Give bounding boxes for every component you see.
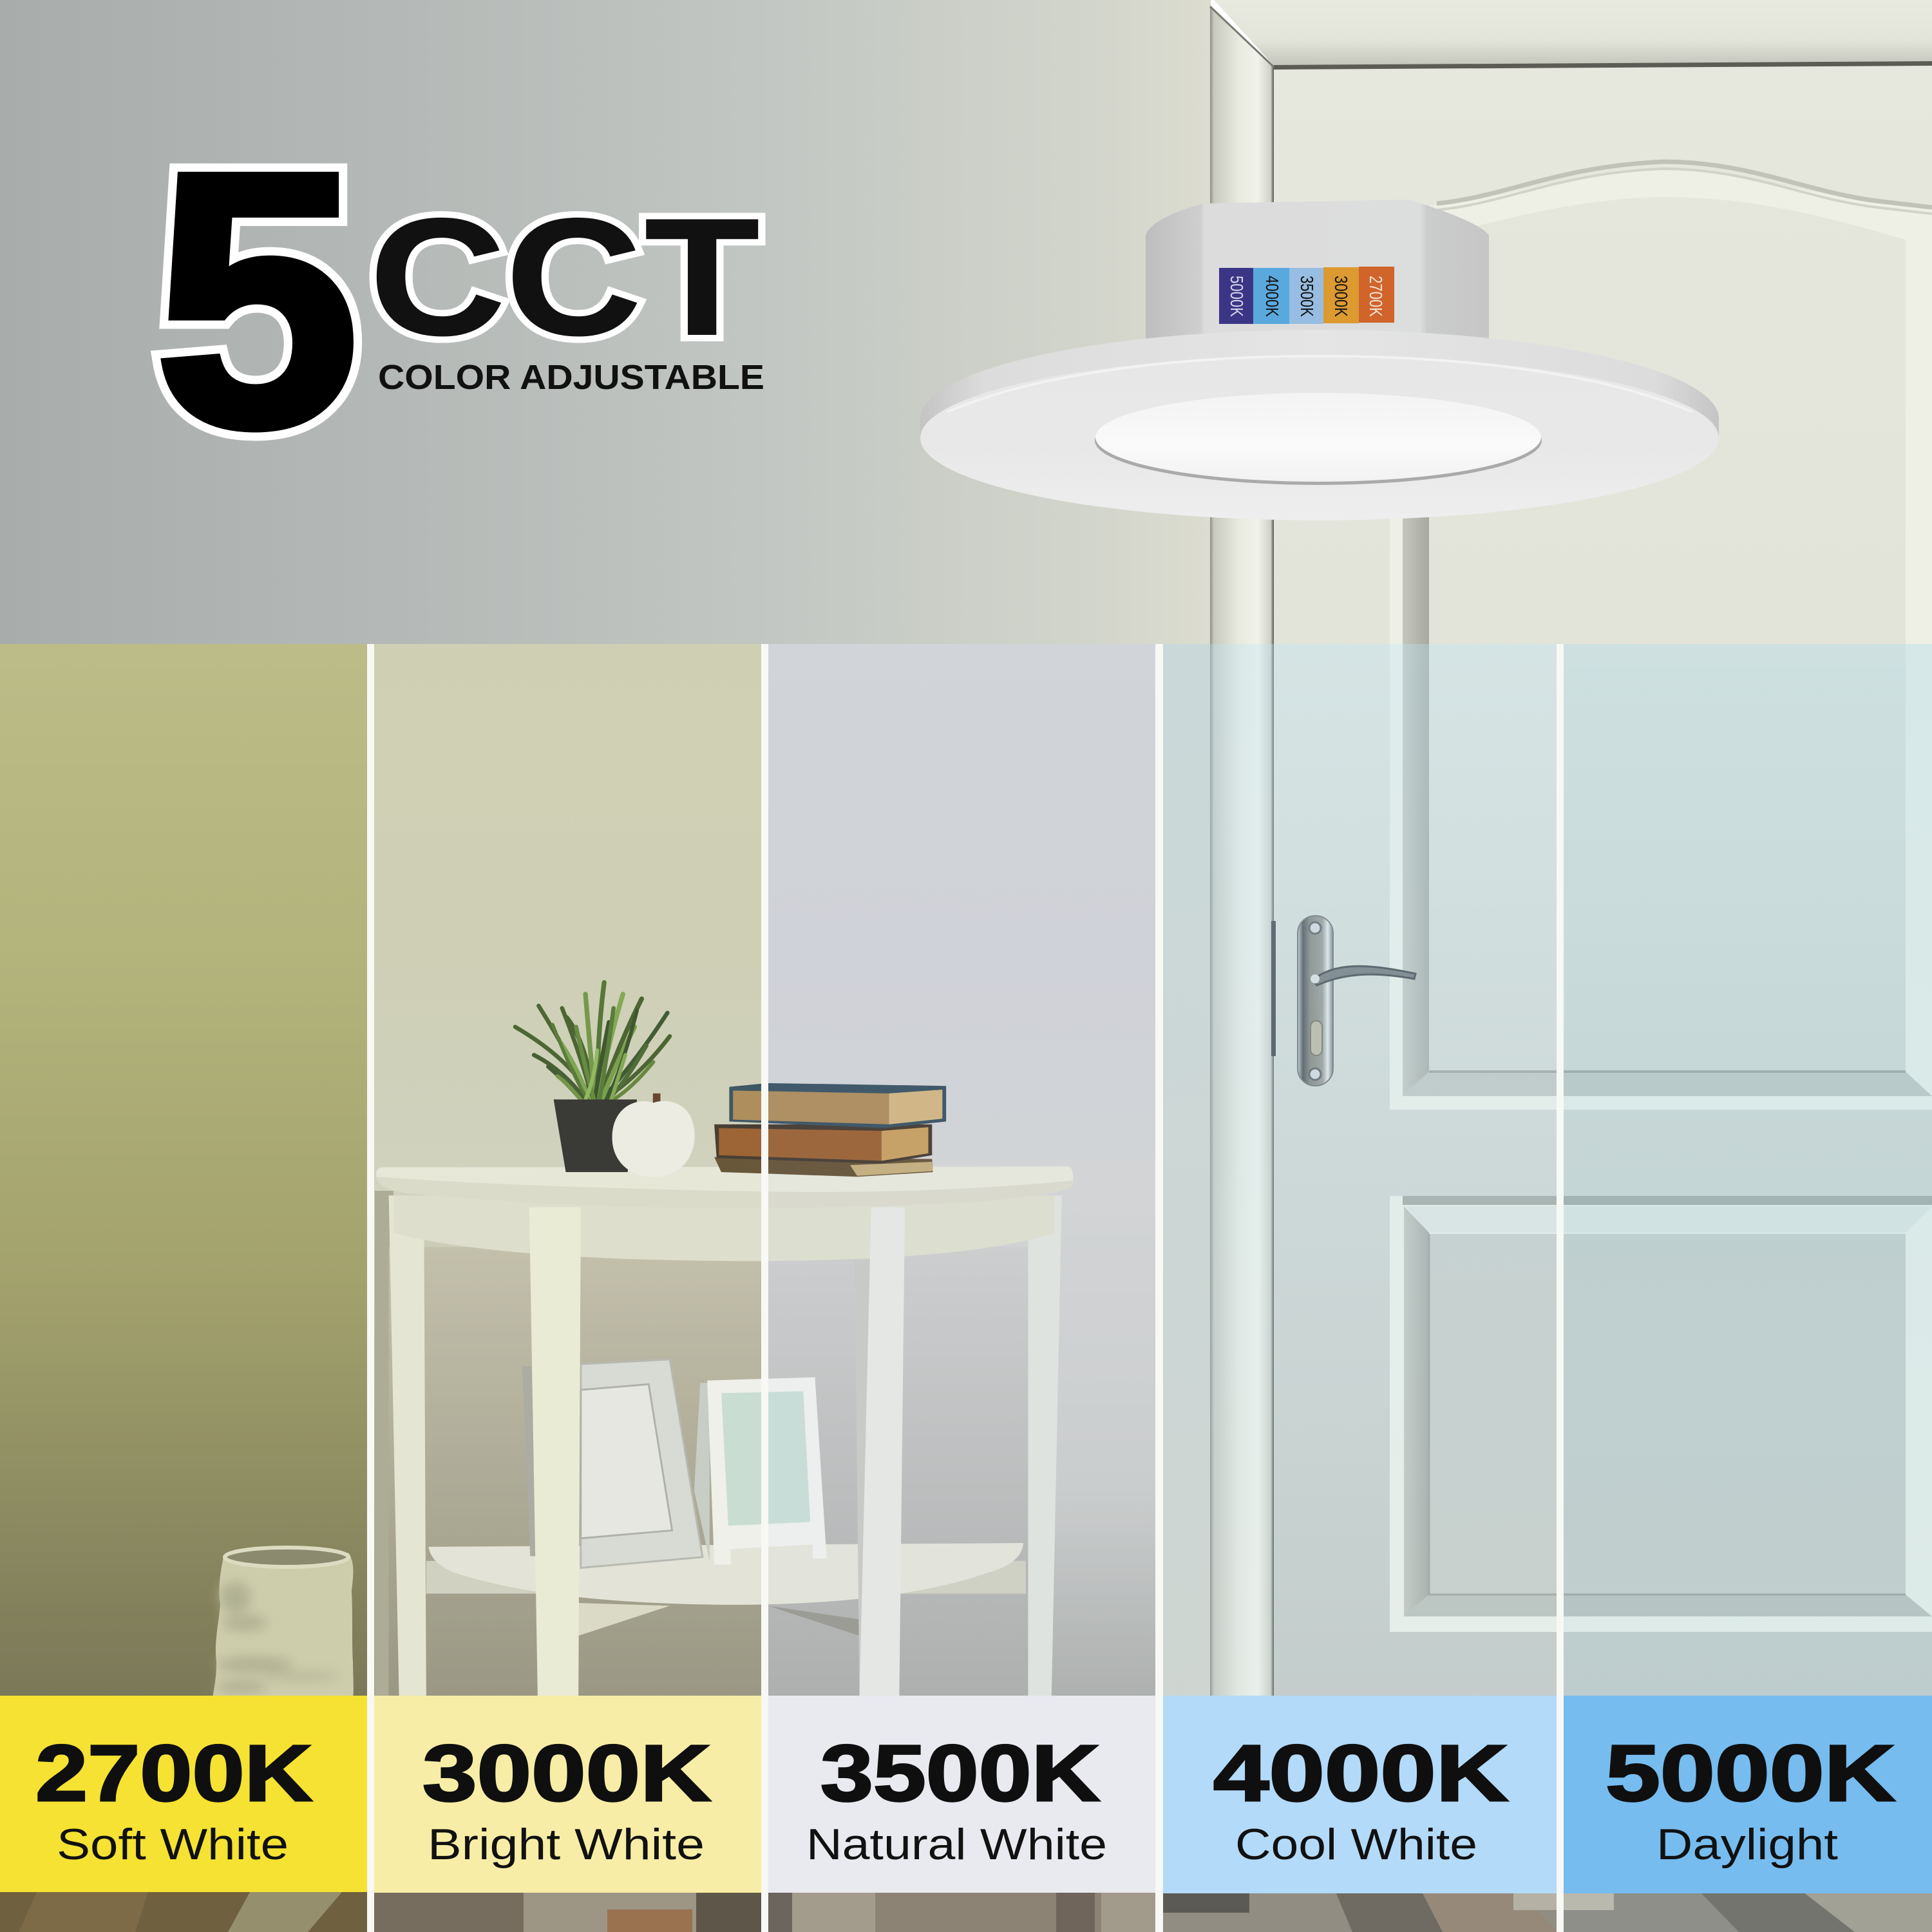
door frame top (1214, 0, 1932, 66)
band wall: 2700K (0, 644, 367, 1700)
floor plank 2a (524, 1892, 696, 1932)
2700K swatch (1359, 267, 1394, 323)
temperature: 2700K (35, 1729, 312, 1818)
temperature: 5000K (1605, 1729, 1895, 1818)
floor plank 3b (792, 1892, 875, 1932)
floor plank 3a (768, 1892, 792, 1932)
frame stand (522, 1367, 536, 1556)
miter line (1210, 6, 1274, 67)
swatch (1564, 1696, 1932, 1893)
upper panel white moulding (1390, 169, 1932, 1288)
floor plank 4d (1513, 1892, 1557, 1910)
middle book cover (714, 1124, 932, 1164)
floor plank base 2 (374, 1887, 761, 1932)
label: 5000K Daylight (1564, 1696, 1932, 1893)
wall under table cool (764, 1247, 1045, 1697)
door gap line (1271, 921, 1276, 1056)
upper panel left bevel (1403, 232, 1429, 1096)
5000K swatch (1219, 268, 1253, 324)
lower panel top line (1403, 1196, 1932, 1205)
front right leg (860, 1208, 905, 1697)
icon: vase (213, 1548, 354, 1700)
temperature: 3500K (820, 1729, 1100, 1818)
heading: 5 CCT Color Adjustable (155, 98, 764, 501)
product: LED downlight (920, 200, 1719, 520)
name: Daylight (1656, 1820, 1838, 1869)
bottom book pages (850, 1162, 933, 1176)
floor plank 2c (696, 1892, 761, 1932)
middle book end (882, 1127, 928, 1161)
label: 2700K Soft White (0, 1696, 367, 1892)
swatch (374, 1696, 761, 1893)
floor plank 1a (19, 1892, 148, 1932)
trim highlight (947, 356, 1692, 412)
floor plank 4c (1422, 1892, 1557, 1932)
handle plate (1298, 916, 1333, 1086)
lever (1312, 966, 1416, 985)
upper panel arch moulding (1437, 162, 1932, 207)
swatch (768, 1696, 1155, 1893)
band tint: 3500K (768, 644, 1155, 1700)
4000K text: 4000K (1262, 276, 1282, 317)
upper panel raised field (1429, 197, 1906, 1072)
junction box (1146, 200, 1489, 341)
3000K text: 3000K (1331, 276, 1351, 317)
upper screw (1309, 922, 1321, 934)
lower panel left bevel (1404, 1206, 1429, 1616)
swatch (1163, 1696, 1557, 1893)
background: wall upper (0, 0, 1211, 644)
floor plank base 4 (1163, 1887, 1557, 1932)
lens (1095, 393, 1541, 482)
top book pages (733, 1090, 889, 1124)
band tint: 5000K (1564, 644, 1932, 1700)
wall under table warm (389, 1247, 764, 1697)
rail under upper panel (1390, 1110, 1932, 1196)
apple stem (653, 1094, 660, 1104)
frame glass (721, 1391, 810, 1526)
vase shading (216, 1582, 341, 1694)
brace right (768, 1605, 860, 1636)
lower panel raised field (1429, 1234, 1906, 1595)
front right leg shadow (855, 1260, 871, 1697)
apron (393, 1195, 1055, 1261)
top book cover (729, 1083, 946, 1128)
floor plank 3d (1101, 1892, 1155, 1932)
floor plank base 1 (0, 1887, 367, 1932)
temperature: 3000K (422, 1729, 711, 1818)
floor plank 1b (228, 1892, 342, 1932)
subtitle: COLOR ADJUSTABLE (378, 358, 764, 397)
frame border (581, 1359, 703, 1568)
trim rim side (920, 419, 1719, 438)
vase mouth (225, 1548, 348, 1567)
upper panel arch moulding inner (1437, 169, 1932, 214)
apple ornament (612, 1101, 695, 1177)
frame back stand (694, 1383, 710, 1561)
upper panel field edge (1429, 1070, 1906, 1073)
2700K text: 2700K (1366, 276, 1386, 317)
white frame (694, 1378, 827, 1564)
door scene (1210, 0, 1932, 1700)
band wall: 3500K (768, 644, 1155, 1700)
label: 4000K Cool White (1163, 1696, 1557, 1893)
swatch (0, 1696, 367, 1892)
keyhole (1311, 1021, 1322, 1056)
middle book pages (719, 1128, 882, 1161)
icon: door handle (1298, 916, 1416, 1086)
name: Soft White (57, 1820, 289, 1869)
5000K text: 5000K (1227, 276, 1247, 317)
lower screw (1309, 1068, 1321, 1080)
CCT sticker (1219, 267, 1394, 324)
console table scene (375, 982, 1073, 1697)
wall behind left side (375, 1191, 393, 1697)
floor plank base 3 (768, 1887, 1155, 1932)
trim rim top (920, 330, 1719, 507)
floor plank base 5 (1564, 1887, 1932, 1932)
plant pot (554, 1099, 637, 1172)
top book end (889, 1090, 942, 1124)
3500K swatch (1289, 268, 1323, 324)
label: 3500K Natural White (768, 1696, 1155, 1893)
brace left (578, 1603, 670, 1636)
band tint: 4000K (1163, 644, 1557, 1700)
band tint: 3000K (374, 644, 761, 1700)
floor plank 2b (607, 1909, 692, 1932)
silver frame (522, 1359, 703, 1568)
wood floor (0, 1887, 1932, 1932)
band dividers (367, 644, 1564, 1932)
name: Bright White (428, 1820, 705, 1869)
shelf apron (426, 1561, 1026, 1594)
vase body (213, 1548, 354, 1700)
floor plank 3c (1056, 1892, 1095, 1932)
lever pivot (1311, 974, 1320, 983)
upper panel bottom bevel (1403, 1072, 1932, 1096)
frame mat (581, 1384, 672, 1539)
CCT: CCT (370, 185, 759, 370)
plant (515, 982, 670, 1099)
back right leg (1028, 1195, 1062, 1697)
door frame shadow line (1274, 61, 1932, 70)
trim face (920, 355, 1719, 520)
lower panel bottom bevel (1404, 1595, 1932, 1616)
name: Natural White (806, 1820, 1107, 1869)
lower panel top bevel (1405, 1206, 1932, 1233)
temperature: 4000K (1213, 1729, 1508, 1818)
door leaf (1274, 0, 1932, 1700)
floor plank 4b (1336, 1892, 1443, 1932)
floor plank 4a (1163, 1892, 1249, 1913)
band wall: 4000K left strip (1163, 644, 1211, 1700)
lower panel field edge (1429, 1234, 1906, 1595)
table top lip shading (376, 1177, 1072, 1209)
band wall: 3000K (374, 644, 761, 1700)
floor plank 5a (1564, 1892, 1614, 1910)
label: 3000K Bright White (374, 1696, 761, 1893)
CCT outline: CCT (370, 185, 759, 370)
frame border (707, 1378, 827, 1564)
numeral 5: 5 (155, 98, 359, 501)
door frame left jamb (1210, 6, 1274, 1700)
floor plank 5b (1700, 1892, 1855, 1932)
books (714, 1083, 946, 1177)
table top (376, 1166, 1073, 1209)
4000K swatch (1253, 268, 1289, 324)
lens shadow (1095, 396, 1542, 485)
back left leg (389, 1195, 426, 1697)
3500K text: 3500K (1297, 276, 1317, 317)
name: Cool White (1235, 1820, 1477, 1869)
lower shelf (428, 1543, 1023, 1605)
numeral 5 outline: 5 (155, 98, 359, 501)
3000K swatch (1323, 267, 1359, 323)
lower panel white moulding (1390, 1196, 1932, 1632)
bottom book (714, 1157, 933, 1177)
front left leg (529, 1208, 581, 1697)
floor plank 5c (1803, 1892, 1932, 1932)
